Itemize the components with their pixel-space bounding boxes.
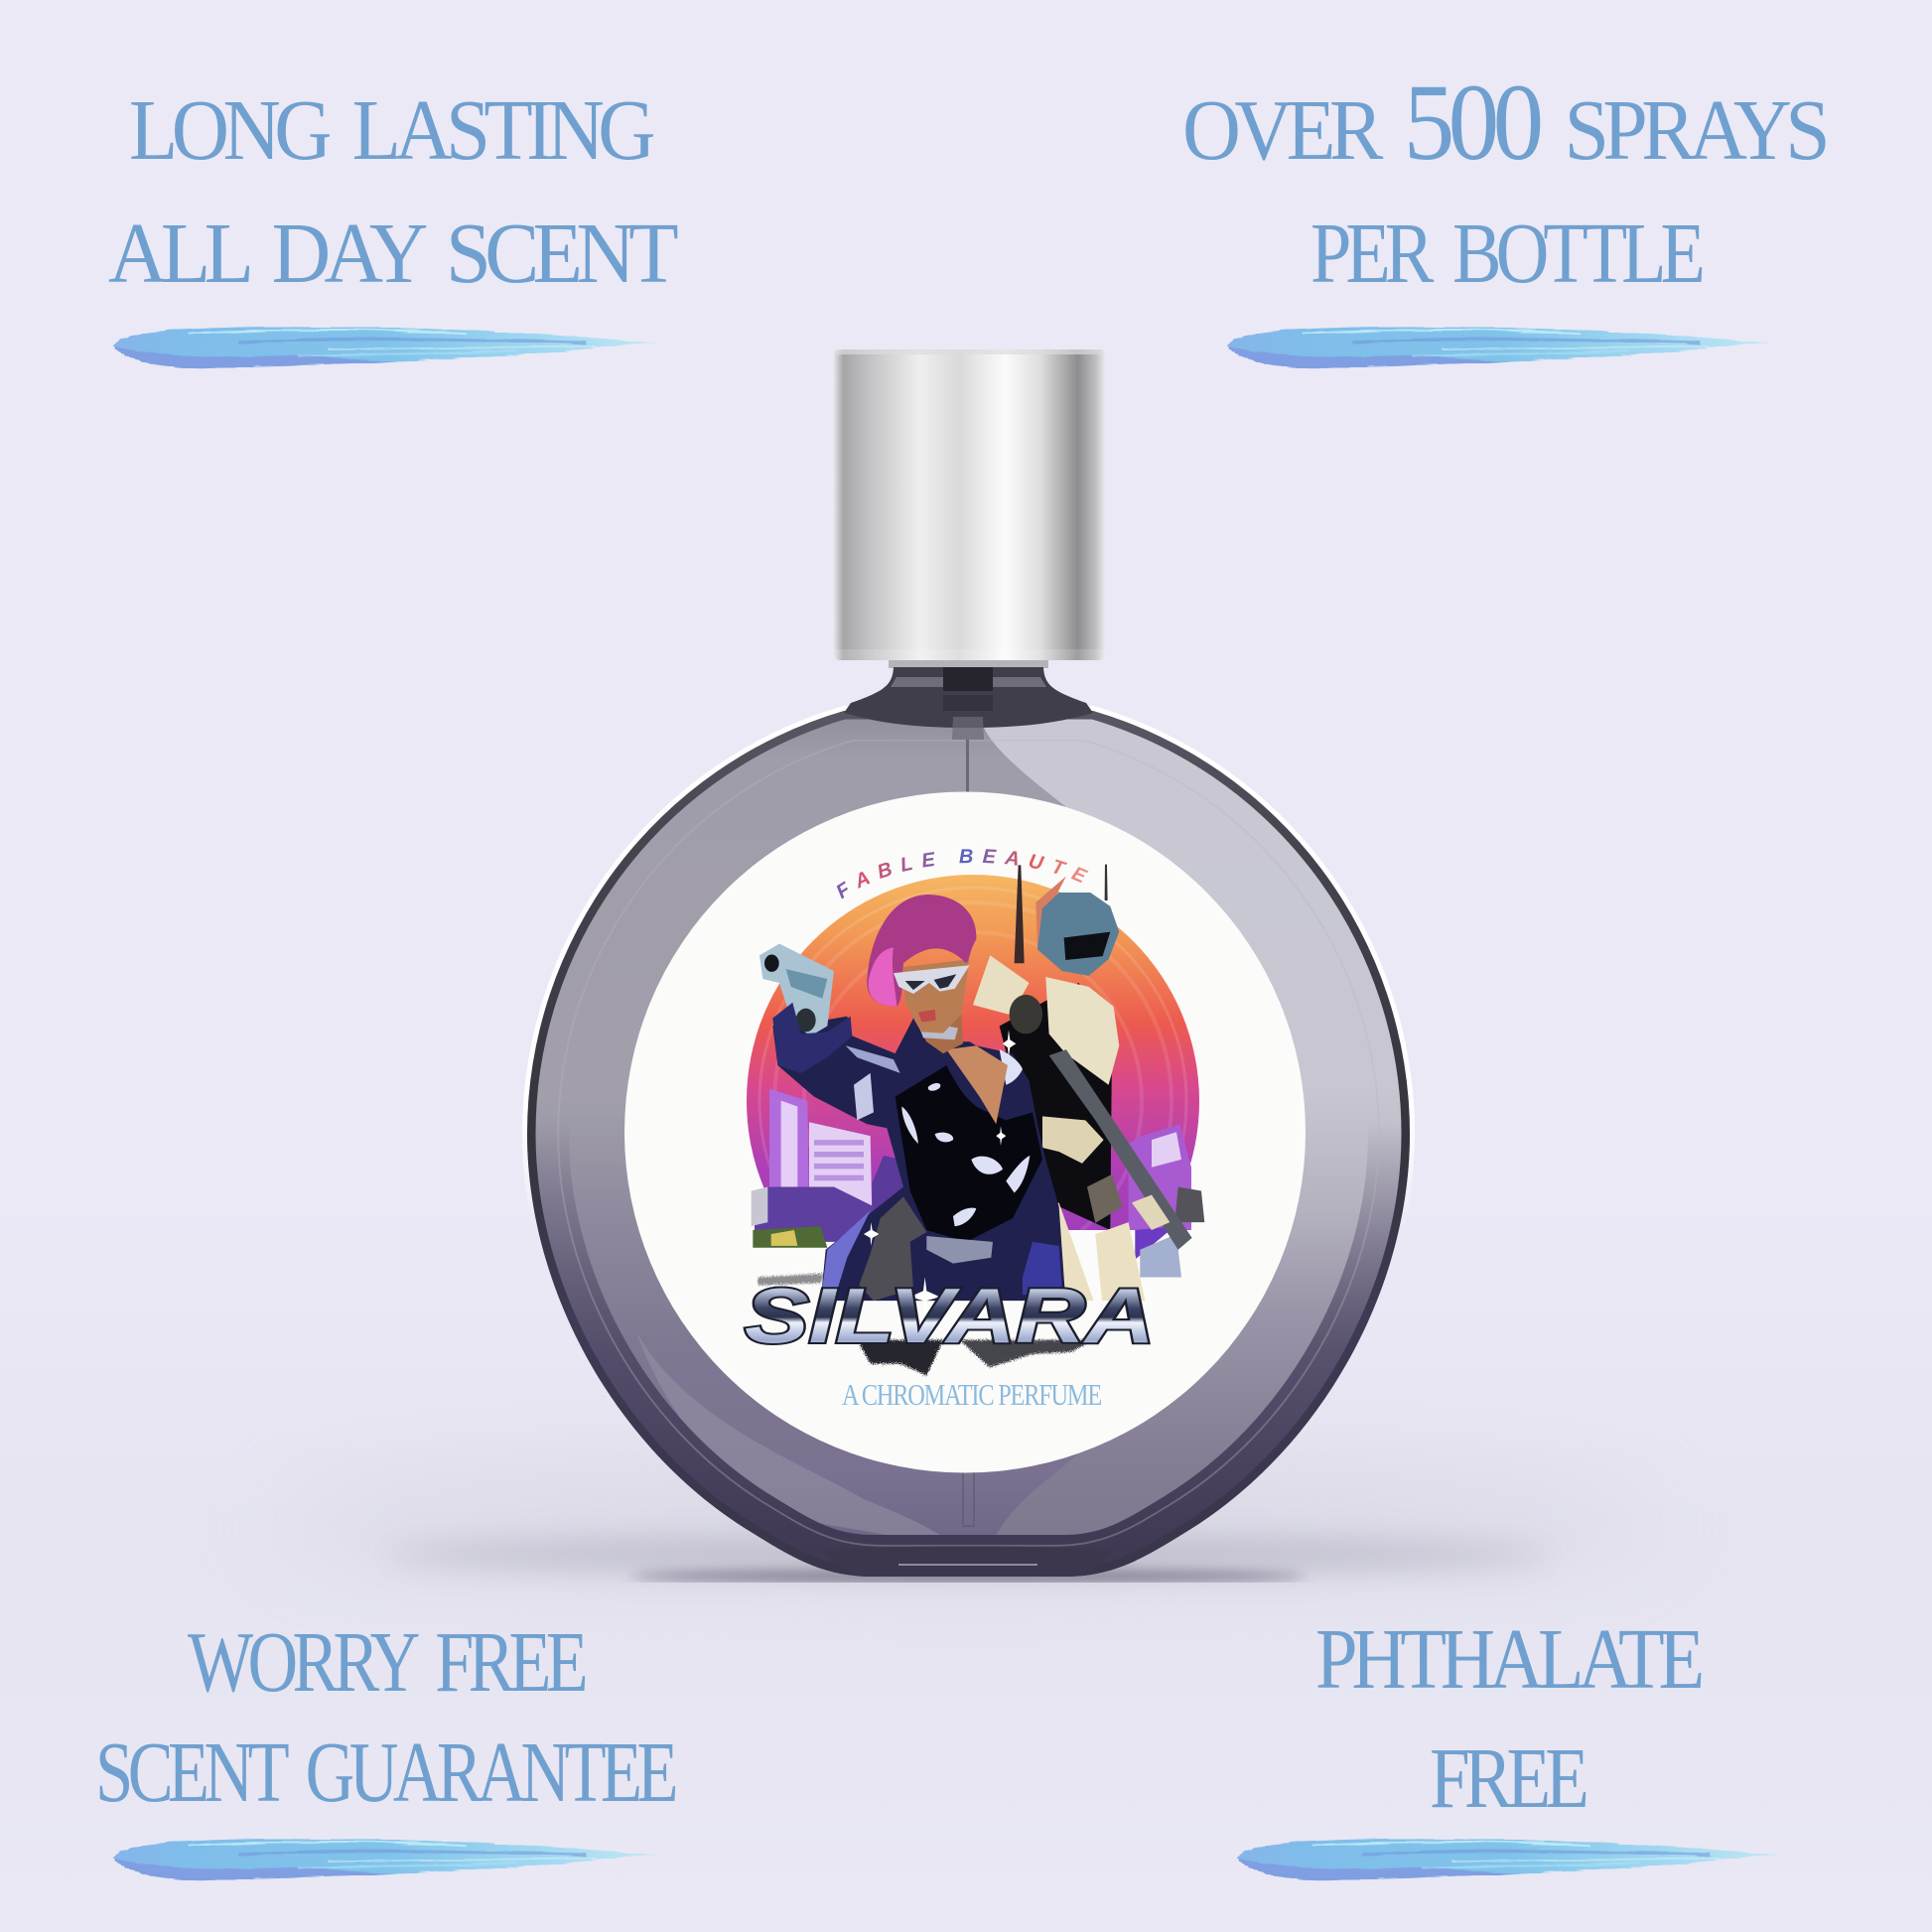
heading: all day scent: ALL DAY SCENT: [108, 205, 678, 301]
heading: worry free: WORRY FREE: [188, 1613, 585, 1710]
pistol: [759, 943, 834, 1035]
rifle: [1049, 1049, 1192, 1250]
label: [624, 792, 1306, 1473]
sun disc: [747, 875, 1199, 1327]
heading: free: FREE: [1430, 1729, 1586, 1826]
visor: [1064, 932, 1110, 960]
city skyline left: [752, 1089, 913, 1248]
heading: scent guarantee: SCENT GUARANTEE: [95, 1724, 675, 1820]
neck: [844, 659, 1093, 728]
holster: [859, 1196, 926, 1301]
chest armor: [1045, 977, 1119, 1085]
robot hand: [1042, 1116, 1104, 1164]
brush stroke underline: [113, 327, 658, 368]
heading: long lasting: LONG LASTING: [129, 81, 654, 178]
antennas: [1015, 865, 1025, 963]
ink spatter: [758, 1274, 1092, 1375]
chest highlights: [901, 1049, 1030, 1226]
lens left: [905, 981, 925, 990]
brush stroke underline: [1227, 327, 1772, 368]
label disc: [624, 792, 1306, 1473]
lower hand: [1132, 1194, 1170, 1230]
base highlight: [898, 1564, 1037, 1566]
feature: phthalate free: [1237, 1610, 1782, 1880]
right thigh: [1013, 1202, 1094, 1301]
lower outer band: [530, 1142, 1406, 1577]
heading: phthalate: PHTHALATE: [1315, 1610, 1701, 1707]
brush stroke underline: [1237, 1839, 1782, 1880]
perfume bottle: [522, 349, 1415, 1577]
feature: worry free scent guarantee: [95, 1613, 675, 1880]
feature: over 500 sprays per bottle: [1182, 62, 1826, 368]
comic illustration: [735, 865, 1211, 1375]
hip highlights: [821, 1210, 871, 1301]
sleeve scales: [854, 1073, 874, 1120]
lens: [934, 974, 956, 989]
inner soft line: [558, 741, 1379, 1546]
product name: SILVARA: [745, 1272, 1155, 1359]
lips: [918, 1010, 936, 1023]
lower left lobe: [636, 1332, 939, 1535]
ear fin: [1035, 876, 1066, 947]
face: [903, 959, 970, 1034]
suit: [772, 1007, 1065, 1301]
neck: [921, 1013, 963, 1053]
heading: over 500 sprays: OVER 500 SPRAYS: [1182, 62, 1826, 183]
cap: [834, 349, 1105, 660]
torso gloss: [896, 1065, 1042, 1242]
rifle magazine: [1087, 1174, 1123, 1223]
dip tube bottom: [963, 1471, 974, 1526]
glass body: [527, 695, 1430, 1577]
city skyline right: [1129, 1124, 1204, 1277]
robot: [973, 865, 1192, 1301]
white glass rim: [527, 711, 1410, 1577]
brand arc text: FABLE BEAUTE: [836, 849, 1088, 899]
hair: [867, 895, 976, 1007]
white lower mask: [735, 1230, 1211, 1340]
woman: [759, 895, 1065, 1314]
chest skin: [946, 1045, 1008, 1124]
shoulder joint: [1010, 995, 1042, 1034]
helmet: [1037, 893, 1119, 976]
heading: per bottle: PER BOTTLE: [1311, 205, 1702, 301]
tagline: A CHROMATIC PERFUME: [842, 1377, 1101, 1412]
collar: [916, 1021, 958, 1039]
sparkles: [864, 1030, 1016, 1314]
floor shadow: [381, 1489, 1553, 1591]
sunglasses: [894, 965, 970, 994]
gloved hand on hip: [1023, 1242, 1062, 1295]
sleeve highlight: [846, 1045, 900, 1073]
base: [919, 1547, 1015, 1548]
brush stroke underline: [113, 1839, 658, 1880]
right highlight: [981, 695, 1430, 1549]
feature: long lasting all day scent: [108, 81, 678, 368]
hair highlight: [869, 947, 897, 1007]
torso shadow: [1000, 983, 1112, 1230]
belt: [926, 1236, 993, 1264]
dark edge band: [527, 711, 1410, 1577]
shoulder plate: [973, 955, 1030, 1015]
dip tube top: [952, 717, 984, 799]
left leg: [1095, 1222, 1145, 1301]
glove: [772, 1003, 852, 1073]
